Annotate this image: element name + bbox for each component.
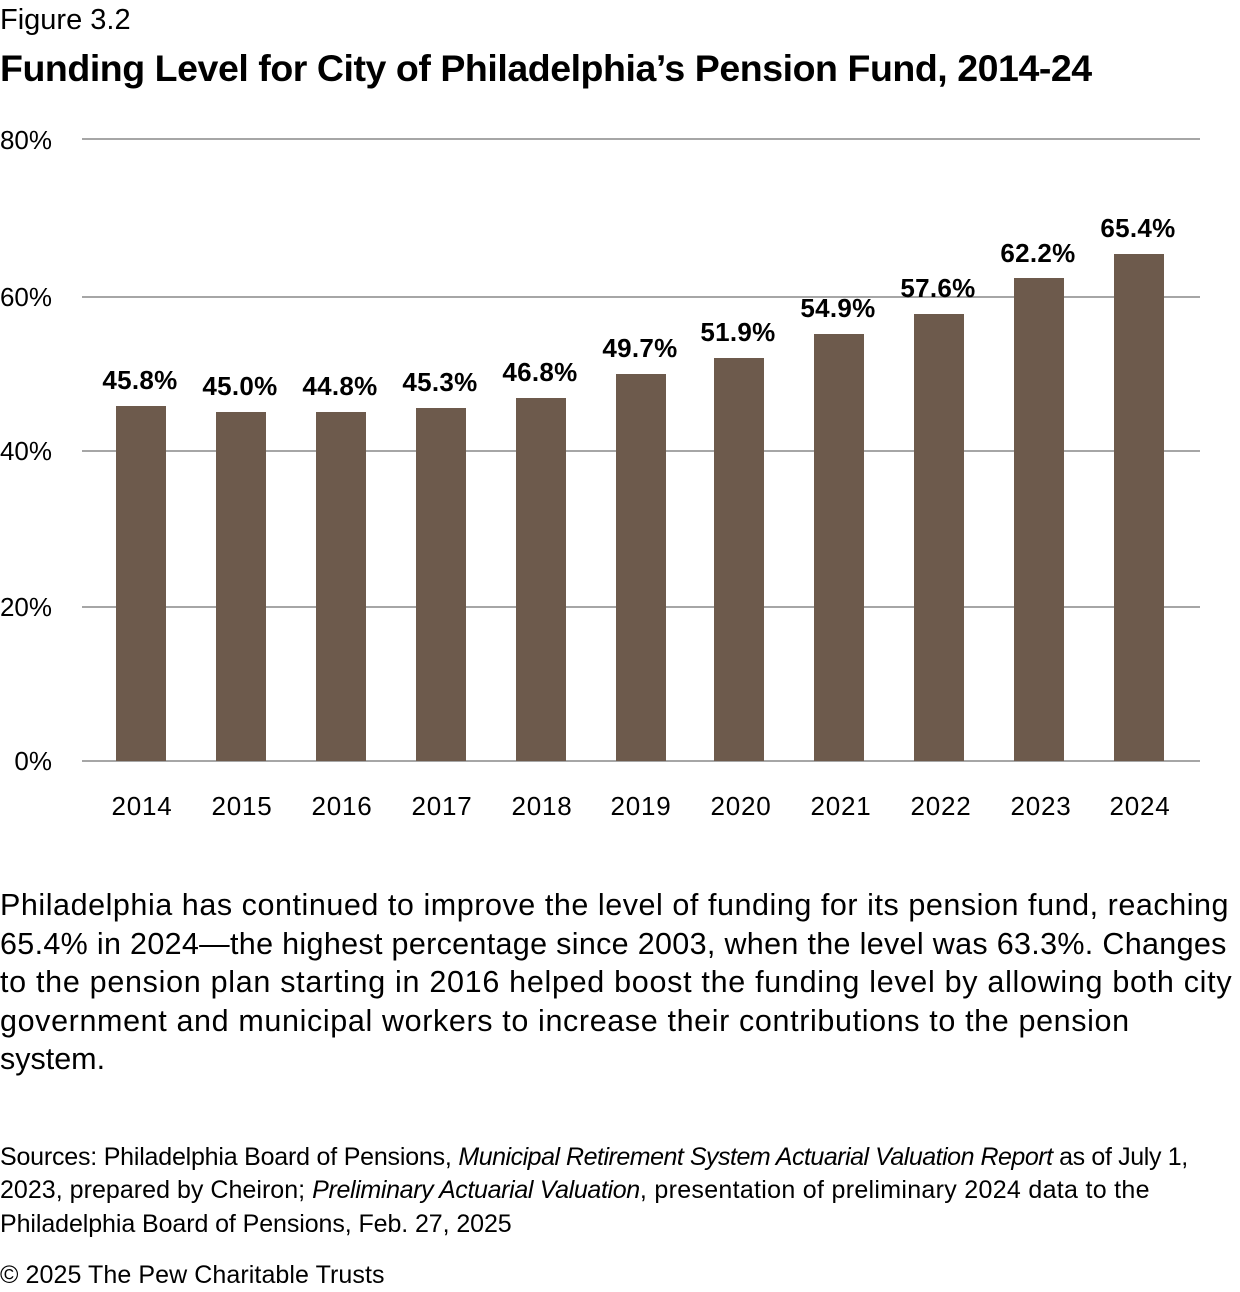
body paragraph: Philadelphia has continued to improve the level of funding for its pension fund, reaching <box>0 888 1229 922</box>
value labels: 54.9% <box>800 293 876 323</box>
y axis labels: 0% <box>14 746 52 776</box>
x axis labels: 2014 <box>111 791 173 821</box>
bar chart <box>0 125 1200 821</box>
sources note: Sources: Philadelphia Board of Pensions, Municipal Retirement System Actuarial Valuation Report as of July 1, <box>0 1143 1188 1171</box>
body paragraph: 65.4% in 2024—the highest percentage since 2003, when the level was 63.3%. Changes <box>0 927 1227 961</box>
body paragraph: government and municipal workers to increase their contributions to the pension <box>0 1004 1130 1038</box>
sources note: 2023, prepared by Cheiron; Preliminary Actuarial Valuation, presentation of preliminary 2024 data to the <box>0 1176 1150 1204</box>
y axis labels <box>0 125 52 776</box>
x axis labels: 2019 <box>610 791 672 821</box>
value labels: 62.2% <box>1000 238 1076 268</box>
x axis labels: 2020 <box>710 791 772 821</box>
copyright: © 2025 The Pew Charitable Trusts <box>0 1261 385 1289</box>
x axis labels: 2022 <box>910 791 972 821</box>
value labels: 45.8% <box>102 365 178 395</box>
value labels: 65.4% <box>1100 213 1176 243</box>
value labels: 46.8% <box>502 357 578 387</box>
bars <box>116 254 1164 761</box>
x axis labels: 2023 <box>1010 791 1072 821</box>
y axis labels: 20% <box>0 592 52 622</box>
body paragraph: system. <box>0 1042 105 1076</box>
x axis labels <box>111 791 1171 821</box>
value labels <box>102 213 1176 401</box>
value labels: 45.0% <box>202 371 278 401</box>
value labels: 51.9% <box>700 317 776 347</box>
y axis labels: 60% <box>0 282 52 312</box>
sources note: Philadelphia Board of Pensions, Feb. 27, 2025 <box>0 1210 512 1238</box>
x axis labels: 2017 <box>411 791 473 821</box>
value labels: 57.6% <box>900 273 976 303</box>
body paragraph: to the pension plan starting in 2016 helped boost the funding level by allowing both city <box>0 965 1232 999</box>
x axis labels: 2021 <box>810 791 872 821</box>
value labels: 44.8% <box>302 371 378 401</box>
title: Funding Level for City of Philadelphia’s Pension Fund, 2014-24 <box>0 47 1092 89</box>
y axis labels: 40% <box>0 436 52 466</box>
figure label: Figure 3.2 <box>0 4 131 36</box>
y axis labels: 80% <box>0 125 52 155</box>
x axis labels: 2024 <box>1109 791 1171 821</box>
x axis labels: 2016 <box>311 791 373 821</box>
body paragraph <box>0 888 1232 1076</box>
sources note <box>0 1143 1188 1238</box>
x axis labels: 2015 <box>211 791 273 821</box>
value labels: 45.3% <box>402 367 478 397</box>
x axis labels: 2018 <box>511 791 573 821</box>
value labels: 49.7% <box>602 333 678 363</box>
